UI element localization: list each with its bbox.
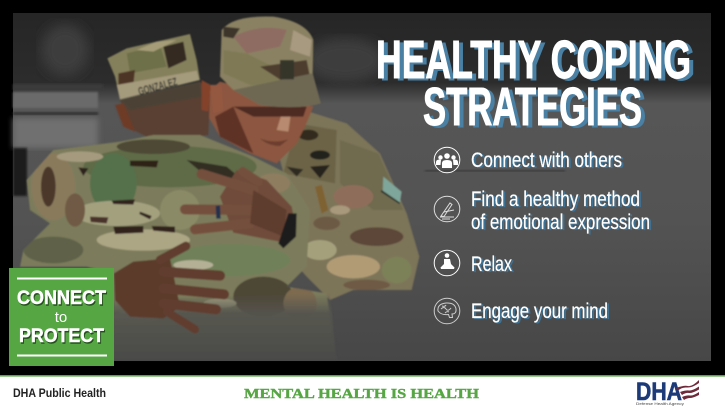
strategy: relax: Relax <box>471 253 512 276</box>
logo: Defense Health Agency: Defense Health Agency <box>636 402 684 406</box>
strategy: emotional expression <box>434 188 652 235</box>
title: healthy coping strategies <box>376 30 695 139</box>
strategy: connect with others: Connect with others <box>473 150 624 173</box>
badge: connect to protect <box>9 268 114 366</box>
strategy: relax: Relax <box>473 254 514 277</box>
badge: connect to protect: to <box>55 309 67 326</box>
icon: people <box>434 147 460 173</box>
strategy: engage your mind: Engage your mind <box>473 301 610 324</box>
strategy: emotional expression: Find a healthy method <box>471 188 640 211</box>
footer <box>0 375 725 410</box>
strategy: emotional expression: of emotional expression <box>471 211 650 234</box>
logo: Defense Health Agency: DHA <box>636 378 682 406</box>
name tape: GONZALEZ <box>137 76 179 98</box>
badge: connect to protect: PROTECT <box>20 328 105 348</box>
badge: connect to protect: PROTECT <box>19 326 104 347</box>
faded lower body <box>113 293 337 360</box>
strategy: connect with others <box>434 147 624 173</box>
badge: connect to protect: CONNECT <box>18 290 107 310</box>
photo: two soldiers embracing <box>20 16 419 360</box>
strategy: engage your mind <box>434 298 610 324</box>
icon: hand writing <box>434 196 460 222</box>
icon: meditating figure <box>434 250 460 276</box>
front soldier body <box>280 110 419 300</box>
title text <box>376 30 691 137</box>
footer: DHA Public Health: DHA Public Health <box>13 386 106 400</box>
strategy: connect with others: Connect with others <box>471 149 622 172</box>
title shadow <box>380 32 695 139</box>
footer: slogan: MENTAL HEALTH IS HEALTH <box>244 387 479 402</box>
strategy: relax <box>434 250 514 277</box>
back soldier cap <box>107 34 200 99</box>
strategy: emotional expression: of emotional expression <box>473 212 652 235</box>
ribbons near wrist <box>315 185 328 213</box>
badge: connect to protect: CONNECT <box>17 288 106 309</box>
front soldier face <box>208 82 313 163</box>
strategy: emotional expression: Find a healthy method <box>473 189 642 212</box>
upper hand <box>185 170 297 248</box>
back soldier torso <box>20 134 329 313</box>
front soldier cap <box>220 16 321 107</box>
back soldier neck <box>120 82 210 140</box>
strategy: engage your mind: Engage your mind <box>471 300 608 323</box>
icon: brain <box>434 298 460 324</box>
lower hand <box>114 246 224 329</box>
